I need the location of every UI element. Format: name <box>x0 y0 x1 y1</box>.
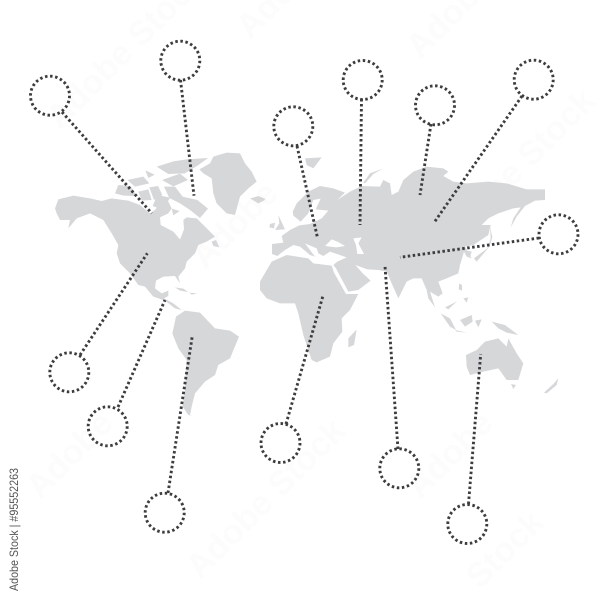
watermark pattern: Adobe <box>399 404 500 506</box>
watermark pattern: Adobe <box>184 174 285 276</box>
Tasmania <box>511 384 516 389</box>
watermark pattern: Stock <box>459 503 551 596</box>
stock image credit: Adobe Stock | #95552263 <box>7 468 21 591</box>
callout: Europe <box>274 107 318 239</box>
Madagascar <box>348 329 357 347</box>
Borneo, Sulawesi and smaller islands <box>445 302 482 327</box>
watermark pattern: Adobe Stock <box>179 412 353 586</box>
Iceland <box>251 196 266 203</box>
callout: Russia west <box>343 60 382 225</box>
Sumatra and Java <box>441 313 467 333</box>
New Guinea <box>492 322 518 335</box>
Taiwan and Philippines <box>459 251 472 303</box>
North America <box>55 196 215 310</box>
Novaya Zemlya <box>363 168 383 183</box>
Australia <box>466 338 523 380</box>
Eurasia <box>272 167 545 307</box>
map: South America <box>172 311 239 416</box>
callout: South America <box>145 336 192 532</box>
Japan <box>474 226 492 262</box>
Caspian Sea <box>353 237 364 254</box>
watermark pattern: Adobe <box>19 404 120 506</box>
callout: Siberia east <box>434 60 553 222</box>
British Isles <box>269 215 285 230</box>
map: Eastern Hemisphere <box>250 157 558 393</box>
Black Sea <box>325 239 345 247</box>
callout: Central America <box>88 300 165 446</box>
world map <box>55 153 558 416</box>
callout: United States <box>50 253 147 392</box>
Canadian Arctic islands <box>115 158 208 218</box>
callout: Siberia north <box>416 86 454 195</box>
watermark pattern: Adobe Stock <box>429 82 600 256</box>
Africa <box>260 255 358 362</box>
Newfoundland and Caribbean islands <box>175 240 219 295</box>
callout: Canada <box>30 76 152 213</box>
New Zealand <box>544 378 558 393</box>
Iceland and Svalbard <box>250 157 322 203</box>
Greenland <box>199 153 257 215</box>
callout: Africa <box>261 297 323 462</box>
callout: Australia <box>448 354 487 544</box>
map: Americas and Greenland <box>55 153 266 310</box>
callout: India <box>380 266 419 488</box>
dotted callouts <box>30 41 578 543</box>
callout: Arctic Canada <box>161 41 200 196</box>
callout: China <box>400 215 578 257</box>
